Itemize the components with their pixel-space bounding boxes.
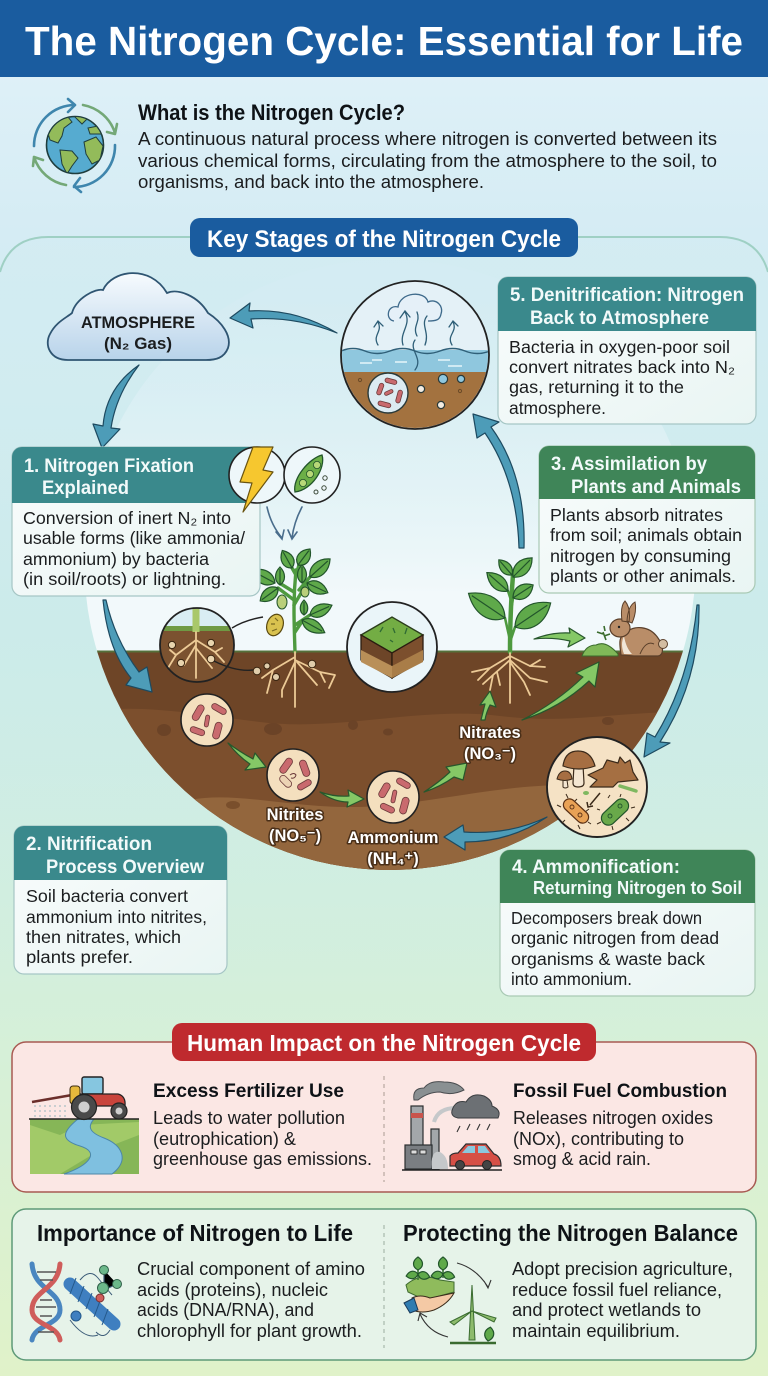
- arrow: green to ammonium: [320, 790, 364, 807]
- icon: tractor over river: [29, 1077, 139, 1174]
- icon: lightning strike: [229, 447, 285, 512]
- label: ammonium: [348, 829, 438, 868]
- label: nitrites: Nitrites: [267, 806, 323, 824]
- card: 3 assimilation: Plants absorb nitrates: [550, 505, 723, 525]
- text: excess fertilizer use: Excess Fertilizer Use: [153, 1080, 344, 1102]
- card: 3 assimilation: from soil; animals obtain: [550, 525, 742, 545]
- card: 5 denitrification: Back to Atmosphere: [530, 307, 709, 329]
- text: excess fertilizer use: greenhouse gas emissions.: [153, 1149, 372, 1169]
- cloud: atmosphere: (N₂ Gas): [104, 334, 172, 353]
- arrow: green to nitrites: [228, 743, 266, 770]
- panel: key stages background: [0, 237, 768, 1000]
- text: excess fertilizer use: [153, 1080, 372, 1169]
- intro: what is the nitrogen cycle: [138, 100, 717, 192]
- card: 1 nitrogen fixation: (in soil/roots) or lightning.: [23, 569, 226, 589]
- label: nitrites: [267, 806, 323, 845]
- arrow: green to nitrates label: [424, 763, 467, 792]
- label: ammonium: (NH₄⁺): [367, 850, 419, 868]
- text: fossil fuel combustion: smog & acid rain.: [513, 1149, 651, 1169]
- card: 1 nitrogen fixation: Conversion of inert N₂ into: [23, 508, 231, 528]
- card: 5 denitrification: 5. Denitrification: Nitrogen: [510, 284, 744, 306]
- card: 2 nitrification: Soil bacteria convert: [26, 886, 188, 906]
- text: excess fertilizer use: (eutrophication) &: [153, 1129, 296, 1149]
- card: 2 nitrification: Process Overview: [46, 856, 205, 878]
- heading: key stages: [190, 218, 578, 257]
- icon: bacteria circle one: [181, 694, 233, 746]
- icon: factory and car: [402, 1082, 502, 1170]
- title banner: [0, 0, 768, 77]
- text: protecting body: [512, 1259, 733, 1341]
- card: 5 denitrification: atmosphere.: [509, 398, 606, 418]
- card: 5 denitrification: gas, returning it to the: [509, 377, 684, 397]
- label: nitrates: Nitrates: [459, 724, 521, 742]
- icon: hand with plants and wind turbine: [404, 1257, 496, 1343]
- label: nitrates: (NO₃⁻): [464, 745, 516, 763]
- card: 1 nitrogen fixation: ammonium) by bacteria: [23, 549, 209, 569]
- heading: human impact: Human Impact on the Nitrogen Cycle: [187, 1030, 581, 1056]
- text: protecting body: and protect wetlands to: [512, 1300, 701, 1320]
- arrow: green nitrates to rabbit: [522, 662, 599, 720]
- card: 1 nitrogen fixation: 1. Nitrogen Fixation: [24, 455, 194, 477]
- icon: denitrification close-up: [340, 281, 490, 432]
- text: importance body: acids (DNA/RNA), and: [137, 1300, 314, 1320]
- icon: right plant with roots: [463, 553, 557, 703]
- arrow: rabbit to decomposers: [644, 605, 699, 757]
- icon: fixation soil close-up: [159, 607, 264, 683]
- card: 2 nitrification: 2. Nitrification: [26, 833, 152, 855]
- icon: pea pod: [284, 447, 340, 503]
- card: 4 ammonification: Returning Nitrogen to Soil: [533, 878, 742, 898]
- card: 5 denitrification: Bacteria in oxygen-poor soil: [509, 337, 730, 357]
- intro: what is the nitrogen cycle: A continuous natural process where nitrogen is converted between its: [138, 129, 717, 149]
- card: 4 ammonification: organisms & waste back: [511, 949, 705, 969]
- text: fossil fuel combustion: Fossil Fuel Combustion: [513, 1080, 727, 1102]
- card: 5 denitrification: [498, 277, 756, 424]
- arrow: denitrification to atmosphere: [230, 303, 337, 333]
- card: 2 nitrification: ammonium into nitrites,: [26, 907, 207, 927]
- card: 2 nitrification: then nitrates, which: [26, 927, 181, 947]
- cycle circle background: [84, 259, 696, 870]
- card: 4 ammonification: Decomposers break down: [511, 908, 702, 928]
- text: fossil fuel combustion: [513, 1080, 727, 1169]
- icon: bacteria circle two: [267, 749, 319, 801]
- icon: rabbit eating: [582, 601, 668, 656]
- icon: bacteria circle three: [367, 771, 419, 823]
- panel: importance and protection: [12, 1209, 756, 1360]
- card: 3 assimilation: plants or other animals.: [550, 566, 736, 586]
- card: 2 nitrification: [14, 826, 227, 974]
- text: fossil fuel combustion: (NOx), contributing to: [513, 1129, 684, 1149]
- icon: dna and protein: [32, 1264, 122, 1340]
- heading: key stages: Key Stages of the Nitrogen Cycle: [207, 226, 561, 253]
- card: 3 assimilation: Plants and Animals: [571, 476, 741, 498]
- text: fossil fuel combustion: Releases nitrogen oxides: [513, 1108, 713, 1128]
- text: importance body: chlorophyll for plant growth.: [137, 1321, 362, 1341]
- intro: what is the nitrogen cycle: organisms, and back into the atmosphere.: [138, 172, 484, 192]
- card: 1 nitrogen fixation: [12, 447, 260, 596]
- arrow: decomposers to ammonium: [444, 817, 547, 850]
- text: protecting body: reduce fossil fuel reliance,: [512, 1280, 722, 1300]
- label: nitrites: (NO₅⁻): [269, 827, 321, 845]
- icon: soil block: [347, 602, 437, 692]
- card: 2 nitrification: plants prefer.: [26, 947, 133, 967]
- text: protecting body: Adopt precision agriculture,: [512, 1259, 733, 1279]
- text: protecting body: maintain equilibrium.: [512, 1321, 680, 1341]
- text: excess fertilizer use: Leads to water pollution: [153, 1108, 345, 1128]
- card: 5 denitrification: convert nitrates back into N₂: [509, 357, 735, 377]
- card: 3 assimilation: [539, 446, 755, 593]
- heading: protecting the balance: Protecting the Nitrogen Balance: [403, 1220, 738, 1246]
- arrow: plant to denitrification: [473, 414, 524, 548]
- card: 1 nitrogen fixation: usable forms (like ammonia/: [23, 528, 245, 548]
- panel: human impact: [12, 1023, 756, 1192]
- text: importance body: Crucial component of amino: [137, 1259, 365, 1279]
- intro: what is the nitrogen cycle: various chemical forms, circulating from the atmosphere to the soil, to: [138, 151, 717, 171]
- card: 1 nitrogen fixation: Explained: [42, 477, 129, 499]
- heading: importance of nitrogen: Importance of Nitrogen to Life: [37, 1220, 353, 1246]
- icon: decomposers circle: [547, 737, 647, 837]
- intro: what is the nitrogen cycle: What is the Nitrogen Cycle?: [138, 100, 405, 125]
- soil cross section: [96, 650, 684, 870]
- card: 4 ammonification: [500, 850, 755, 996]
- arrow: fixation into soil: [103, 600, 152, 692]
- card: 4 ammonification: 4. Ammonification:: [512, 856, 680, 878]
- heading: human impact: [172, 1023, 596, 1061]
- cloud: atmosphere: ATMOSPHERE: [81, 313, 195, 332]
- title banner: The Nitrogen Cycle: Essential for Life: [25, 18, 743, 64]
- icon: left plant with nodules: [249, 545, 335, 707]
- label: nitrates: [459, 724, 521, 763]
- arrow: green plant to rabbit: [534, 628, 585, 647]
- card: 4 ammonification: into ammonium.: [511, 969, 632, 989]
- arrow: atmosphere to fixation: [93, 365, 139, 448]
- card: 3 assimilation: nitrogen by consuming: [550, 546, 731, 566]
- cloud: atmosphere: [48, 273, 229, 360]
- text: importance body: acids (proteins), nucleic: [137, 1280, 328, 1300]
- icon: globe with cycle arrows: [33, 99, 117, 192]
- text: importance body: [137, 1259, 365, 1341]
- card: 3 assimilation: 3. Assimilation by: [551, 453, 707, 475]
- arrow: green nitrates to roots: [480, 691, 496, 720]
- card: 4 ammonification: organic nitrogen from dead: [511, 928, 719, 948]
- label: ammonium: Ammonium: [348, 829, 438, 847]
- arrows: lightning and pod to plant: [267, 507, 302, 539]
